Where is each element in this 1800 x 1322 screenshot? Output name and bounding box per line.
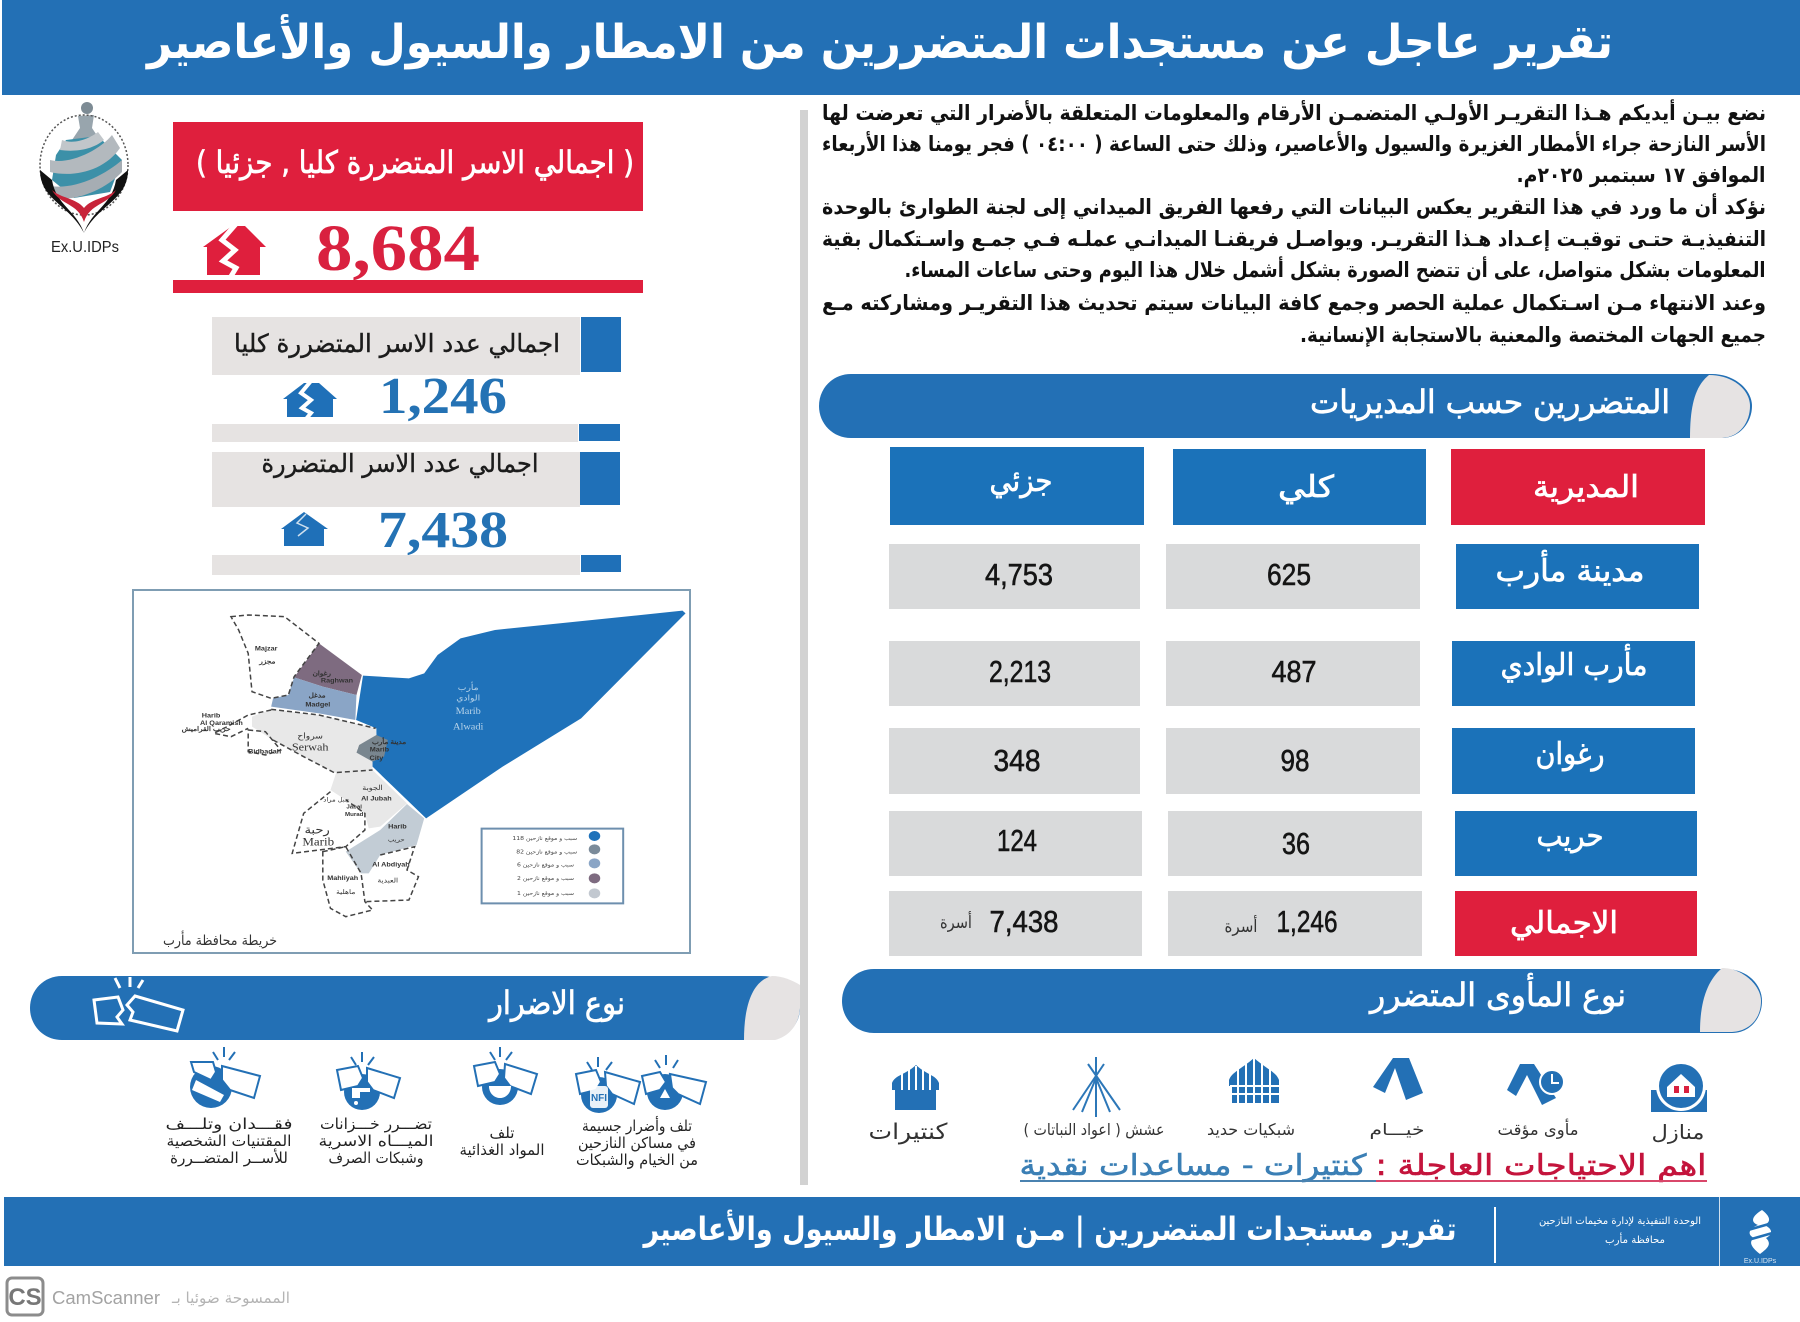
header band: [2, 0, 1800, 95]
urgent needs: اهم الاحتياجات العاجلة :: [1376, 1148, 1706, 1183]
damage captions: تضـــرر خـــزانات: [320, 1115, 432, 1133]
row: Marib Al-Wadi: مأرب الوادي: [1500, 643, 1648, 683]
map legend: 82 سبب و موقع نازحين: [516, 850, 577, 855]
shelter: houses: [1651, 1061, 1707, 1144]
table header row: جزئي: [990, 464, 1052, 499]
row: Marib city: [889, 544, 1699, 609]
map labels: Al Qaramish: [200, 720, 243, 727]
panel: partially damaged: [212, 449, 621, 575]
map labels: [182, 646, 484, 896]
number: total: 8,684: [316, 212, 480, 285]
panel: partially damaged: اجمالي عدد الاسر المتضررة: [262, 449, 538, 478]
row: Marib city: مدينة مأرب: [1496, 549, 1644, 589]
footer organisation: الوحدة التنفيذية لإدارة مخيمات النازحين: [1539, 1216, 1701, 1227]
map labels: العبدية: [378, 877, 398, 885]
map labels: Serwah: [292, 742, 329, 753]
logo caption: Ex.U.IDPs: [51, 239, 119, 256]
map labels: Mahliyah: [327, 875, 358, 882]
footer logo: [1744, 1210, 1777, 1265]
number: partially damaged: 7,438: [378, 502, 508, 559]
icon: broken house blue: [283, 381, 337, 419]
row: Marib Al-Wadi: [889, 641, 1695, 706]
map legend: 6 سبب و موقع نازحين: [517, 863, 574, 869]
map labels: Marib: [456, 707, 481, 717]
number: fully damaged: 1,246: [379, 368, 507, 425]
row: total: الاجمالي: [1510, 906, 1618, 941]
damage captions: تلف وأضرار جسيمة: [582, 1116, 692, 1135]
scanner watermark: [7, 1278, 290, 1315]
row: Raghwan: 98: [1280, 743, 1310, 778]
damage item: water: [337, 1052, 400, 1110]
damage item: NFI: NFI: [591, 1093, 607, 1104]
map caption: خريطة محافظة مأرب: [163, 930, 277, 949]
damage item: food: [474, 1047, 537, 1105]
map labels: Al Abdiyah: [372, 862, 410, 869]
map labels: City: [370, 755, 383, 762]
map labels: Raghwan: [321, 678, 353, 685]
shelter: houses: منازل: [1652, 1120, 1704, 1144]
row: Raghwan: رغوان: [1536, 737, 1604, 772]
map labels: مدينة مأرب: [372, 736, 406, 746]
shelter: iron mesh: [1207, 1058, 1295, 1139]
map labels: Madgel: [305, 702, 330, 709]
damage captions: الميـــاه الاسرية: [318, 1132, 434, 1150]
row: Harib: 124: [997, 823, 1037, 858]
row: Raghwan: [889, 728, 1695, 794]
table header row: المديرية: [1533, 470, 1639, 505]
table header row: [890, 447, 1705, 525]
map labels: Bidbadah: [248, 749, 281, 755]
map region: Marib City: [356, 735, 388, 762]
row: Harib: 36: [1282, 826, 1310, 861]
map labels: مأرب: [458, 681, 479, 693]
row: total: 7,438: [990, 904, 1058, 939]
panel: total damaged families: [173, 122, 643, 293]
logo: Ex.U.IDPs: [40, 102, 128, 256]
red heading: [173, 122, 643, 211]
icon: broken pieces: [94, 977, 183, 1031]
map labels: مدغل: [309, 692, 326, 699]
map legend: 1 سبب و موقع نازحين: [517, 891, 574, 897]
map labels: الوادي: [456, 693, 480, 703]
map legend: 2 سبب و موقع نازحين: [517, 876, 574, 882]
damage item: NFI: [576, 1057, 640, 1113]
damage captions: فقـــدان وتلـــف: [166, 1115, 292, 1133]
footer band: محافظة مأرب: [1605, 1232, 1665, 1246]
damage captions: [166, 1115, 698, 1169]
shelter: huts: [1024, 1057, 1164, 1140]
table header row: كلي: [1278, 470, 1335, 505]
footer title: تقرير مستجدات المتضررين | مـن الامطار والسيول والأعاصير: [642, 1209, 1456, 1249]
title: تقرير عاجل عن مستجدات المتضررين من الامطار والسيول والأعاصير: [145, 13, 1613, 70]
map labels: سرواح: [297, 731, 323, 741]
damage captions: للأســر المتضــررة: [170, 1148, 288, 1167]
map region: Al Jubah: [330, 770, 407, 828]
map labels: الجوبة: [362, 783, 383, 792]
shelter: huts: عشش ( اعواد النباتات ): [1024, 1120, 1164, 1140]
damage captions: وشبكات الصرف: [328, 1149, 424, 1167]
row: Marib city: 625: [1267, 557, 1311, 592]
scanner watermark: CS: [8, 1284, 42, 1311]
section pill: damage type: نوع الاضرار: [487, 984, 625, 1022]
section pill: affected by district: [819, 374, 1752, 438]
map labels: Marib: [302, 835, 334, 848]
map labels: حريب: [388, 837, 405, 844]
map panel: Marib governorate: [133, 590, 690, 953]
map region: Madghal: [271, 677, 356, 720]
scanner watermark: الممسوحة ضوئيا بـ: [171, 1289, 290, 1307]
map labels: Al Jubah: [361, 796, 392, 803]
map labels: Majzar: [255, 646, 278, 653]
row: Harib: [889, 811, 1697, 876]
section pill: shelter type: نوع المأوى المتضرر: [1368, 973, 1626, 1014]
row: Marib Al-Wadi: 2,213: [989, 654, 1051, 689]
icon: cracked house blue: [281, 512, 328, 546]
scanner watermark: CamScanner: [52, 1288, 160, 1308]
map labels: جبل مراد: [323, 797, 349, 804]
urgent needs: [1020, 1148, 1707, 1183]
map region: Marib Al-Wadi: [356, 611, 686, 818]
row: total: [889, 891, 1697, 956]
intro text block: [822, 98, 1766, 347]
map labels: رغوان: [312, 670, 332, 677]
map region: Serwah: [252, 709, 376, 773]
map legend: 118 سبب و موقع نازحين: [512, 836, 577, 842]
damage captions: في مساكن النازحين: [578, 1134, 696, 1153]
map dashed district outlines: [214, 615, 418, 917]
shelter: caravans: [868, 1065, 948, 1145]
map region: Harib: [346, 804, 424, 873]
shelter: temporary: مأوى مؤقت: [1498, 1118, 1578, 1140]
footer logo: Ex.U.IDPs: [1744, 1258, 1777, 1265]
map labels: مجزر: [258, 659, 276, 665]
map labels: Alwadi: [453, 722, 484, 732]
damage item: belongings: [190, 1047, 260, 1108]
row: Raghwan: 348: [994, 743, 1040, 778]
map labels: ماهلية: [336, 888, 356, 896]
row: total: أسرة: [1224, 915, 1258, 937]
map labels: رحبة: [304, 823, 330, 836]
intro text block: الموافق ١٧ سبتمبر ٢٠٢٥م.: [1516, 163, 1766, 187]
section pill: damage type: [30, 976, 800, 1040]
shelter: temporary: [1498, 1064, 1578, 1140]
icon: broken house red: [203, 224, 266, 278]
panel: fully damaged: اجمالي عدد الاسر المتضررة كليا: [234, 329, 560, 358]
map labels: Murad: [345, 812, 364, 818]
damage captions: تلف: [490, 1124, 514, 1142]
panel: fully damaged: [212, 317, 621, 442]
section pill: shelter type: [842, 968, 1762, 1033]
row: Marib Al-Wadi: 487: [1272, 654, 1316, 689]
map labels: Harib: [388, 824, 407, 830]
damage captions: المواد الغذائية: [460, 1141, 544, 1159]
map region: Raghwan: [294, 643, 362, 695]
damage captions: من الخيام والشبكات: [576, 1151, 698, 1169]
panel: total damaged families: ( اجمالي الاسر المتضررة كليا , جزئيا ): [196, 145, 634, 181]
map labels: Jabal: [346, 805, 362, 810]
central divider: [800, 110, 808, 1185]
section pill: affected by district: المتضررين حسب المديريات: [1310, 383, 1670, 421]
map labels: حريب القراميش: [182, 725, 231, 733]
map labels: Marib: [370, 747, 389, 754]
map labels: Harib: [202, 713, 220, 719]
row: Harib: حريب: [1536, 819, 1604, 854]
shelter: tents: [1370, 1058, 1424, 1139]
row: total: 1,246: [1276, 904, 1338, 939]
shelter: tents: خيـــام: [1370, 1120, 1424, 1139]
damage captions: المقتنيات الشخصية: [166, 1132, 292, 1150]
row: total: أسرة: [940, 911, 972, 933]
footer band: [4, 1197, 1800, 1266]
shelter: iron mesh: شبكيات حديد: [1207, 1120, 1295, 1139]
row: Marib city: 4,753: [985, 557, 1053, 592]
urgent needs: كنتيرات - مساعدات نقدية: [1020, 1148, 1367, 1182]
map legend: [482, 829, 623, 903]
shelter: caravans: كنتيرات: [868, 1120, 948, 1145]
damage item: shelters: [642, 1055, 706, 1110]
table: affected families by district: [889, 447, 1705, 956]
